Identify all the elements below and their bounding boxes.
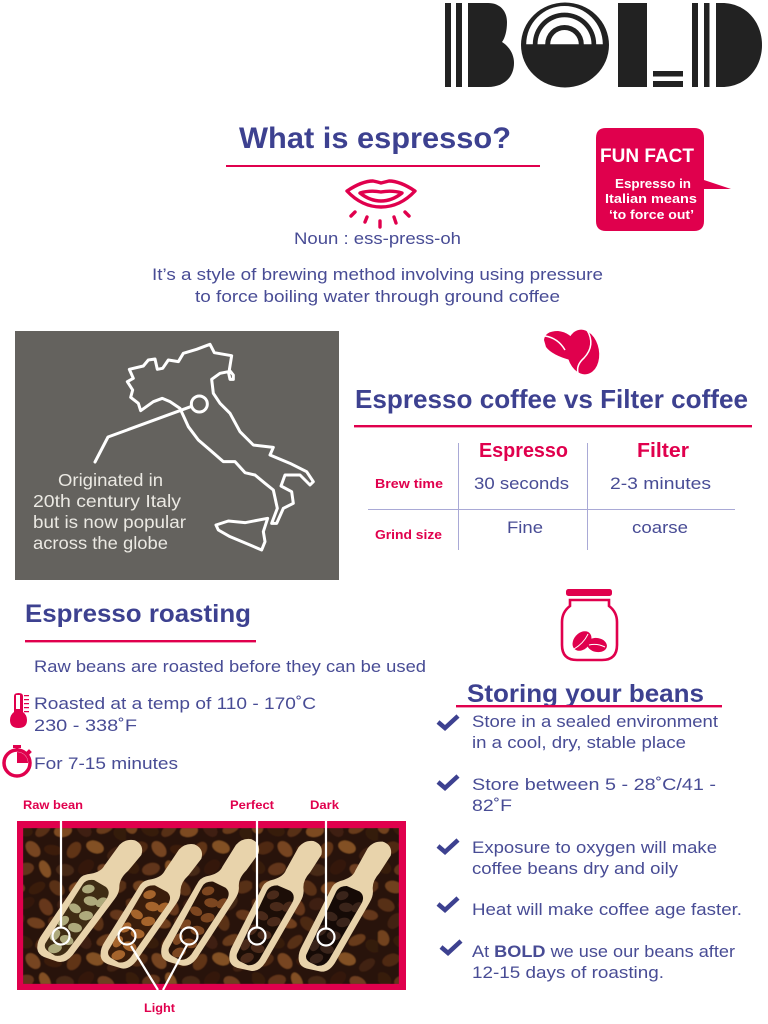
tip 3 [438,838,717,878]
heading: Storing your beans: Storing your beans [467,680,704,708]
table: espresso vs filter: Grind size [375,527,442,542]
tip 3: coffee beans dry and oily [472,859,679,878]
heading: Espresso coffee vs Filter coffee: Espresso coffee vs Filter coffee [355,384,748,414]
tip 5 [441,941,735,982]
table: espresso vs filter: Espresso [479,440,568,462]
storing underline [456,705,722,707]
tip 2: Store between 5 - 28˚C/41 - [472,775,716,794]
tip 5: At BOLD we use our beans after [472,942,735,961]
tip 1 [438,712,718,752]
panel: Italy origin [15,331,339,580]
photo: scoops of coffee beans [17,821,406,990]
icon: coffee beans [544,327,603,377]
roasting underline [25,640,256,642]
map: Italy outline [95,344,313,550]
text: definition [152,265,603,306]
text: origin caption: Originated in [58,470,163,490]
labels: roast levels: Perfect [230,798,274,812]
callout: fun fact [596,128,731,231]
text: temperature: Roasted at a temp of 110 - 170˚C [34,694,316,713]
labels: roast levels: Dark [310,798,339,812]
icon: coffee jar [562,589,617,660]
text: origin caption: but is now popular [33,512,186,532]
labels: roast levels: Raw bean [23,798,83,812]
icon: lips [347,181,415,227]
tip 2: 82˚F [472,796,512,815]
table: espresso vs filter: Brew time [375,476,443,491]
heading underline [354,425,752,427]
icon: thermometer [10,693,29,728]
table: espresso vs filter: Filter [637,440,689,462]
table: espresso vs filter: Fine [507,518,543,537]
callout lines and circles [52,821,334,990]
text: definition: to force boiling water through ground coffee [195,287,560,306]
title underline [226,165,540,167]
text: temperature: 230 - 338˚F [34,716,137,735]
callout: fun fact: Italian means [605,191,697,206]
labels: roast levels: Light [144,1001,175,1015]
callout: fun fact: Espresso in [615,176,691,191]
tip 1: Store in a sealed environment [472,712,718,731]
text: definition: It’s a style of brewing method involving using pressure [152,265,603,284]
scoops [37,838,405,974]
table: espresso vs filter: coarse [632,518,688,537]
text: temperature [34,694,316,735]
text: origin caption: 20th century Italy [33,491,181,511]
tip 1: in a cool, dry, stable place [472,733,686,752]
callout: fun fact: ‘to force out’ [609,207,694,222]
heading: Espresso roasting: Espresso roasting [25,600,251,628]
tip 4: Heat will make coffee age faster. [472,900,742,919]
logo: BOLD [445,2,762,88]
text: duration: For 7-15 minutes [34,754,178,773]
title: What is espresso?: What is espresso? [239,122,511,155]
table: espresso vs filter: 30 seconds [474,474,569,493]
icon: stopwatch [4,745,32,776]
text: raw beans: Raw beans are roasted before they can be used [34,657,426,676]
text: origin caption [33,470,186,553]
labels: roast levels [23,798,339,1015]
text: origin caption: across the globe [33,533,168,553]
tip 5: 12-15 days of roasting. [472,963,664,982]
callout: fun fact: FUN FACT [600,146,694,167]
list: storage tips [438,712,742,982]
tip 3: Exposure to oxygen will make [472,838,717,857]
table: espresso vs filter: 2-3 minutes [610,474,711,493]
text: pronunciation: Noun : ess-press-oh [294,229,461,248]
tip 2 [438,775,716,815]
table: espresso vs filter [368,440,735,550]
